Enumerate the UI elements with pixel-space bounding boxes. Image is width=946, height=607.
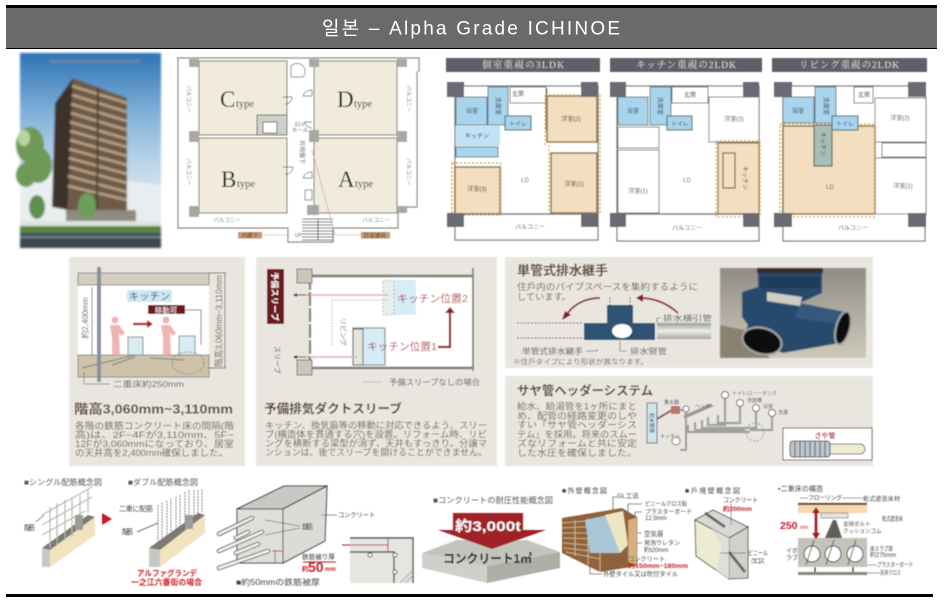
diagram: rebar cover: コンクリート: [338, 511, 375, 519]
panel: floor height: 移動可: [155, 305, 178, 315]
balcony labels: バルコニー: [185, 158, 192, 186]
panel: exhaust duct sleeve: スリーブ: [273, 346, 282, 374]
diagram: exterior wall: プラスターボード: [645, 508, 692, 516]
heading: header system: サヤ管ヘッダーシステム: [517, 383, 653, 398]
unit plan: private room 3LDK: LD: [521, 178, 530, 184]
unit plan: kitchen 2LDK: バルコニー: [672, 225, 702, 232]
panel: exhaust duct sleeve: [256, 257, 497, 466]
unit plan: living 2LDK: キッチン: [819, 132, 826, 156]
heading: exhaust duct: 予備排気ダクトスリーブ: [264, 401, 402, 416]
inset: sheath pipe: [783, 428, 872, 460]
callout: building name: 一之江六番街の場合: [131, 577, 202, 587]
room: A type: type: [355, 179, 373, 190]
diagram: exterior wall: 約150mm~180mm: [628, 562, 688, 570]
diagram: rebar cover: 鉄筋被り厚: [302, 552, 336, 561]
unit plan: living 2LDK: 洋室(2): [890, 114, 910, 122]
heading: drain joint: 単管式排水継手: [517, 263, 608, 278]
diagram: rebar cover: 50: [308, 559, 324, 575]
room: D type: type: [354, 99, 372, 110]
unit plan: kitchen 2LDK: キッチン重視の2LDK: [636, 59, 736, 71]
unit plan: living 2LDK: 洋室(1): [893, 182, 913, 190]
photo: apartment building: [16, 53, 161, 248]
panel: exhaust duct sleeve: 予備スリーブなしの場合: [389, 377, 480, 387]
panel: floor height: 階高3,060mm~3,110mm: [213, 275, 224, 367]
body text: drain joint: 住戸内のパイプスペースを集約するように: [517, 281, 698, 292]
balcony labels: バルコニー: [185, 85, 192, 113]
diagram: concrete compressive strength: 約3,000t: [455, 518, 521, 534]
unit plan: private room 3LDK: 洋室(3): [467, 185, 487, 193]
body text: header system: め、配管の経路変更のしや: [517, 410, 637, 421]
diagram: drain joint: 排水横引管: [663, 313, 712, 323]
unit plan: living 2LDK: LD: [826, 185, 835, 191]
balcony labels: バルコニー: [405, 85, 412, 113]
diagram: double reinforcement: ■ダブル配筋概念図: [128, 477, 198, 487]
diagram: double floor structure: 乾式遮音床: [882, 515, 903, 523]
unit plan: private room 3LDK: 浴室: [466, 107, 478, 115]
diagram: exterior wall: GL工法: [617, 491, 639, 500]
unit plan: private room 3LDK: 玄関: [512, 90, 524, 98]
header band: [6, 5, 937, 49]
diagram: exterior wall: 約t20mm: [644, 546, 668, 554]
diagram: exterior wall: コンクリート: [628, 555, 665, 563]
diagram: header pipes: 給水竪管: [648, 413, 655, 433]
entry doors: [283, 63, 312, 200]
body text: floor height: 各階の鉄筋コンクリート床の間隔(階: [75, 420, 234, 431]
diagram: single reinforcement: ■シングル配筋概念図: [24, 477, 102, 487]
panel: exhaust duct sleeve: キッチン位置2: [397, 292, 468, 305]
elevator core: [257, 115, 312, 135]
photo: pipe joint: [720, 268, 866, 359]
room: B type: type: [237, 179, 255, 190]
body text: exhaust duct: ブ(構造体を貫通する穴)を設置。リフォーム時、リビ: [265, 428, 487, 440]
diagram: drain joint: [513, 294, 712, 366]
body text: header system: 給水、給湯管を1ヶ所にまと: [517, 400, 637, 412]
diagram: double reinforcement: 二重に配筋: [119, 504, 153, 513]
diagram: double floor structure: ▪二重床の構造: [778, 484, 823, 493]
diagram: concrete compressive strength: [422, 495, 560, 583]
unit plan: private room 3LDK: 洗面室: [494, 97, 502, 115]
diagram: exterior wall: 発泡ウレタン: [644, 539, 680, 547]
body text: floor height: 高)は、2F~4Fが3,110mm、5F~: [75, 429, 234, 440]
unit plan: living 2LDK: 浴室: [792, 107, 804, 115]
panel: floor height: 約2,400mm: [80, 297, 90, 339]
room: B type: [199, 138, 287, 213]
diagram: double floor structure: 250: [780, 520, 798, 532]
unit plan: private room 3LDK: 個室重視の3LDK: [482, 59, 564, 71]
diagram: header pipes: [647, 390, 788, 450]
diagram: party wall: コンクリート: [723, 496, 758, 504]
unit plan: living 2LDK: 玄関: [858, 91, 870, 99]
body text: header system: ズなリフォームと共に安定: [517, 438, 637, 448]
inset: sheath pipe: さや管: [814, 431, 836, 440]
diagram: exterior wall: 空気層: [644, 529, 664, 538]
diagram: double floor structure: 乾式遮音床材: [863, 495, 900, 503]
diagram: header pipes: 洗濯: [778, 409, 788, 416]
diagram: double floor structure: プラスターボード: [877, 561, 913, 569]
diagram: header pipes: トイレローータンク: [732, 390, 777, 397]
panel: floor height: [69, 257, 245, 466]
diagram: double floor structure: 床スラブ厚: [870, 545, 893, 553]
title: 일본 – Alpha Grade ICHINOE: [322, 18, 620, 40]
body text: drain joint: [517, 281, 698, 302]
panel: sheath pipe header system: [505, 376, 873, 466]
body text: floor height: 12Fが3,060mmになっており、居室: [75, 438, 234, 449]
unit plan: private room 3LDK: [446, 58, 600, 240]
diagram: drain joint: 排水竪管: [630, 346, 667, 356]
unit plan: living 2LDK: [772, 58, 927, 241]
body text: header system: [517, 400, 637, 458]
room: A type: [314, 138, 397, 213]
unit plan: private room 3LDK: 洋室(1): [564, 180, 584, 188]
diagram: double floor structure: 約275mm: [870, 551, 896, 559]
diagram: double floor structure: 支持ボルト: [843, 520, 871, 528]
unit plan: kitchen 2LDK: LD: [683, 178, 692, 184]
unit plan: kitchen 2LDK: 洗面室: [656, 97, 664, 115]
diagram: double floor structure: クッションゴム: [843, 527, 882, 535]
body text: exhaust duct: ングを横断する梁型が消ず、天井もすっきり。分譲マ: [265, 438, 487, 448]
diagram: header pipes: 洗面機: [747, 397, 762, 404]
unit plan: living 2LDK: バルコニー: [838, 225, 868, 232]
panel: exhaust duct sleeve: キッチン位置1: [367, 340, 437, 353]
diagram: double floor structure: フローリング: [808, 494, 842, 502]
unit plan: kitchen 2LDK: 浴室: [627, 107, 639, 115]
diagram: party wall: ■戸境壁概念図: [685, 486, 740, 495]
panel: floor height: 二重床約250mm: [113, 379, 184, 389]
diagram: single reinforcement: 配筋: [24, 523, 35, 532]
body text: header system: した水圧を確保しました。: [517, 447, 637, 458]
diagram: exterior wall: 外壁タイル又は吹付タイル: [603, 569, 678, 578]
diagram: party wall: 約200mm: [723, 504, 752, 513]
unit plan: living 2LDK: リビング重視の2LDK: [799, 59, 899, 71]
floor plan: building layout: [177, 58, 419, 242]
body text: exhaust duct: [265, 420, 487, 458]
unit plan: private room 3LDK: トイレ: [509, 122, 527, 128]
diagram: exterior wall: ■外壁概念図: [562, 486, 607, 495]
diagram: double floor structure: 天井クロス: [880, 569, 901, 577]
heading: floor height: 階高3,060mm~3,110mm: [74, 402, 233, 416]
balcony labels: [185, 85, 412, 224]
diagram: exterior wall: [562, 486, 692, 578]
diagram: rebar cover: 鉄筋: [302, 522, 313, 531]
balcony labels: バルコニー: [362, 217, 390, 224]
diagram: party wall: ビニール: [748, 548, 768, 557]
body text: header system: すい「サヤ管ヘッダーシス: [517, 419, 637, 430]
unit plan: kitchen 2LDK: [610, 58, 762, 241]
arrow: red triangle: [102, 513, 112, 525]
body text: exhaust duct: キッチン、換気扇等の移動に対応できるよう、スリー: [265, 420, 487, 430]
unit plan: kitchen 2LDK: キッチン: [741, 166, 748, 190]
room: C type: type: [236, 99, 254, 110]
diagram: rebar cover: [219, 486, 413, 587]
panel: single-pipe drain joint: [505, 257, 873, 368]
diagram: header pipes: 浴室: [763, 403, 773, 410]
footer rule: [6, 594, 933, 597]
diagram: double floor structure: mm: [800, 525, 808, 531]
tag labels: 内廊下: [242, 232, 259, 240]
diagram: header pipes: キッチン: [660, 434, 680, 440]
diagram: concrete compressive strength: ■コンクリートの耐圧性能概念図: [433, 495, 553, 505]
room: D type: D: [337, 87, 354, 112]
room: C type: C: [220, 87, 235, 112]
body text: floor height: の天井高を2,400mm確保しました。: [75, 447, 228, 458]
diagram: party wall: [685, 486, 768, 579]
unit plan: kitchen 2LDK: トイレ: [671, 122, 689, 128]
diagram: header pipes: 量水器: [664, 399, 679, 406]
unit plan: private room 3LDK: キッチン: [465, 133, 489, 140]
unit plan: living 2LDK: トイレ: [836, 122, 854, 128]
diagram: double floor structure: [778, 484, 913, 577]
panel: exhaust duct sleeve: リビング: [339, 318, 348, 346]
balcony labels: 共用廊下: [298, 140, 306, 164]
unit plan: kitchen 2LDK: 洋室(1): [628, 187, 648, 195]
diagram: header pipes: ヘッダー: [695, 403, 715, 410]
elevator core: ELV: [295, 122, 305, 128]
unit plan: living 2LDK: 洗面室: [822, 97, 830, 115]
diagram: double floor structure: ラブ: [786, 554, 798, 562]
columns: [189, 59, 407, 217]
diagram: double reinforcement: [119, 477, 205, 587]
diagram: drain joint: 単管式排水継手: [522, 346, 583, 356]
diagram: rebar cover: 約: [302, 564, 309, 573]
room: D type: [314, 61, 397, 135]
diagram: party wall: クロス: [750, 557, 765, 565]
unit plan: kitchen 2LDK: 洋室(2): [724, 115, 744, 123]
callout: building name: アルファグランデ: [137, 568, 197, 578]
diagram: exterior wall: 12.5mm: [645, 516, 667, 522]
body text: header system: テム」を採用。将来のスムー: [517, 428, 637, 440]
unit plan: kitchen 2LDK: 玄関: [684, 91, 696, 99]
diagram: concrete compressive strength: コンクリート1㎥: [443, 551, 532, 566]
tag labels: [238, 150, 390, 240]
diagram: drain joint: ※住戸タイプにより形状が異なります。: [513, 357, 648, 366]
diagram: single reinforcement: [24, 477, 102, 567]
unit plan: private room 3LDK: 洋室(2): [561, 115, 581, 123]
diagram: rebar cover: ■約50mmの鉄筋被厚: [236, 577, 320, 587]
body text: exhaust duct: ンションは、後でスリーブを開けることができません。: [265, 446, 487, 458]
diagram: exterior wall: ビニールクロス貼: [645, 500, 687, 508]
balcony labels: バルコニー: [405, 158, 412, 186]
diagram: double reinforcement: 配筋: [122, 527, 133, 536]
room: B type: B: [221, 167, 236, 192]
elevator core: ホール: [292, 127, 309, 134]
room: A type: A: [338, 167, 355, 192]
body text: drain joint: しています。: [517, 292, 571, 302]
diagram: rebar cover: mm: [325, 567, 336, 573]
unit plan: private room 3LDK: バルコニー: [515, 224, 545, 231]
balcony labels: バルコニー: [213, 217, 241, 224]
panel: floor height: キッチン: [129, 291, 170, 303]
stairs: UP: [295, 233, 303, 239]
diagram: double floor structure: イボ: [786, 547, 798, 555]
tag labels: 防音建具: [364, 232, 386, 240]
stairs: [295, 219, 333, 240]
panel: exhaust duct sleeve: 予備スリーブ: [270, 272, 280, 321]
body text: floor height: [75, 420, 234, 458]
room: C type: [199, 61, 287, 135]
callout: building name: [131, 568, 202, 587]
